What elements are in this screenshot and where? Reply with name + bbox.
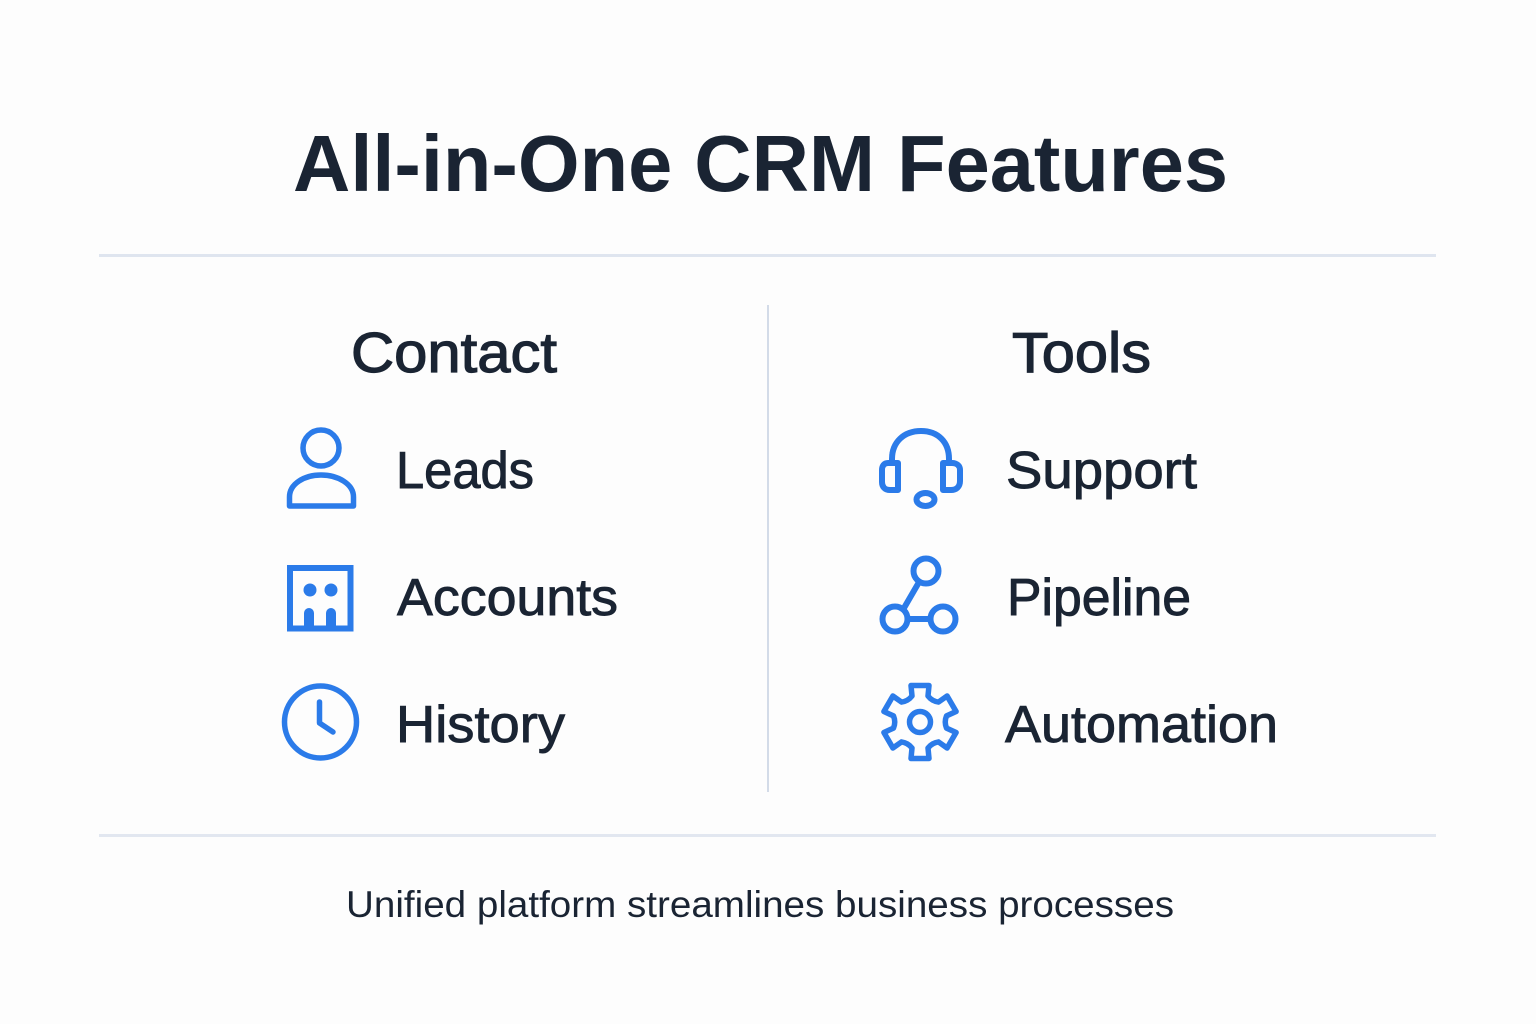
panel: contact <box>284 321 618 758</box>
icon: headset <box>882 431 960 506</box>
icon: gear <box>884 686 956 758</box>
panel: tools <box>882 321 1278 758</box>
label: leads: Leads <box>396 442 534 500</box>
label: support: Support <box>1006 442 1198 500</box>
footer caption: Unified platform streamlines business processes <box>346 884 1174 925</box>
title: All-in-One CRM Features <box>293 119 1228 208</box>
icon: clock <box>284 686 356 758</box>
heading: tools: Tools <box>1012 321 1151 385</box>
label: accounts: Accounts <box>397 569 618 627</box>
icon: person <box>290 430 354 506</box>
label: automation: Automation <box>1005 696 1278 754</box>
label: pipeline: Pipeline <box>1007 569 1191 627</box>
heading: contact: Contact <box>351 321 557 385</box>
icon: building <box>290 568 350 630</box>
label: history: History <box>396 696 565 754</box>
icon: pipeline <box>882 558 956 632</box>
